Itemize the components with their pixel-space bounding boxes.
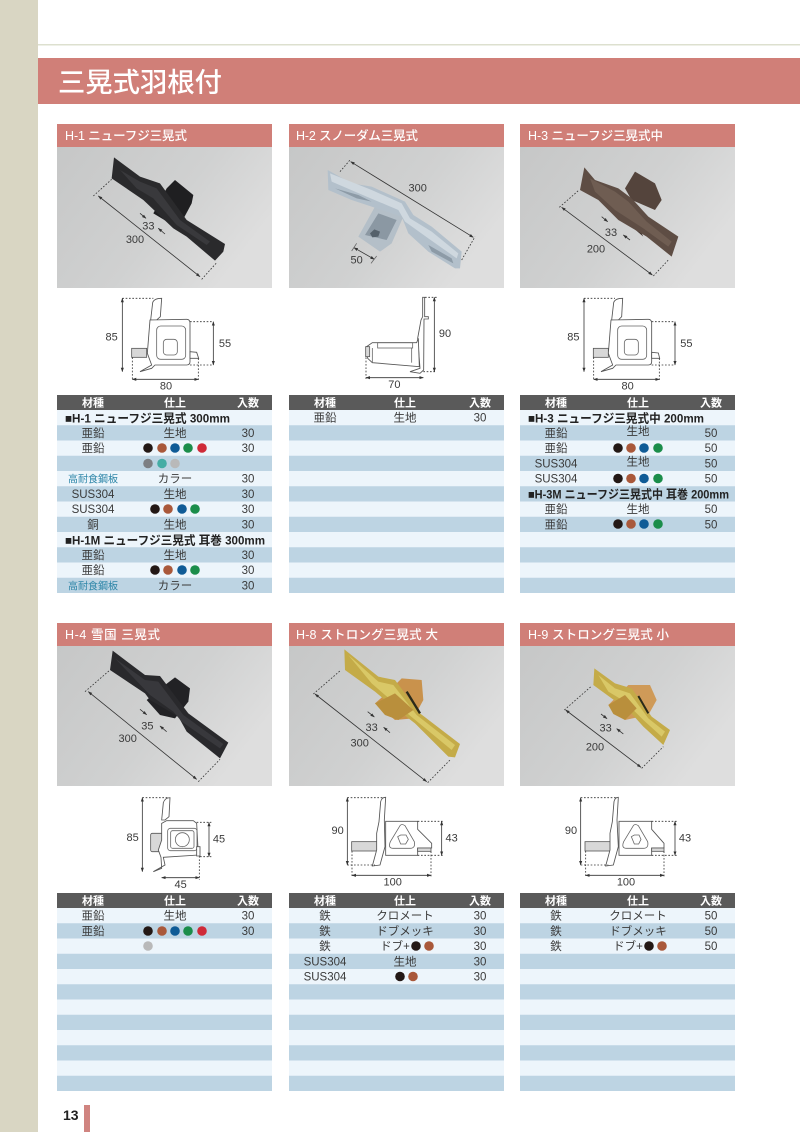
table: H-8: クロメート <box>376 910 434 923</box>
table: H-4: 30 <box>242 926 254 938</box>
table: H-9: 鉄 <box>550 939 562 953</box>
drawing: H-4 section: 45 <box>175 879 187 891</box>
photo: H-3: 200 <box>587 243 605 255</box>
table: H-8: SUS304 <box>304 972 347 984</box>
table: H-8: ドブ+ <box>380 939 410 953</box>
drawing: H-8 section: 43 <box>446 832 458 844</box>
heading: H-3 <box>520 124 735 147</box>
table: H-3: 50 <box>705 443 717 455</box>
drawing: H-8 section: 100 <box>384 876 402 888</box>
table: H-9: 50 <box>705 911 717 923</box>
table: H-3: ■H-3 ニューフジ三晃式中 200mm <box>528 410 704 426</box>
heading: H-1 <box>57 124 272 147</box>
photo: H-4: 300 <box>119 733 137 745</box>
photo: H-8: 33 <box>366 722 378 734</box>
drawing: H-2 section <box>366 297 451 391</box>
table: H-3: ■H-3M ニューフジ三晃式中 耳巻 200mm <box>528 486 729 502</box>
drawing: H-2 section: 90 <box>439 328 451 340</box>
drawing: H-4 section <box>127 798 225 891</box>
panel: H-2 <box>289 124 504 593</box>
table: H-4 <box>57 893 272 1091</box>
table: H-2: 30 <box>474 413 486 425</box>
table: H-9: 鉄 <box>550 909 562 923</box>
table: H-8 <box>289 893 504 1091</box>
table: H-1: 生地 <box>164 548 187 562</box>
table: H-1: 亜鉛 <box>82 427 105 440</box>
table: H-9: 入数 <box>700 894 722 908</box>
table: H-8: SUS304 <box>304 956 347 968</box>
table: H-3 <box>520 395 735 593</box>
table: H-1: ■H-1 ニューフジ三晃式 300mm <box>65 410 230 426</box>
drawing: H-1 section: 80 <box>160 381 172 393</box>
table: H-1: 30 <box>242 565 254 577</box>
heading: H-4 <box>57 623 272 646</box>
table: H-1: 30 <box>242 550 254 562</box>
table: H-1: 銅 <box>87 517 99 531</box>
photo: H-3: 33 <box>605 227 617 239</box>
table: H-2: 入数 <box>469 396 491 410</box>
table: H-3: 生地 <box>626 424 650 438</box>
drawing: H-8 section: 90 <box>332 825 344 837</box>
table: H-8: 材種 <box>314 894 336 908</box>
page number <box>63 1105 90 1132</box>
drawing: H-3 section: 80 <box>622 381 634 393</box>
table: H-8: 30 <box>474 926 486 938</box>
drawing: H-9 section: 43 <box>679 832 691 844</box>
table: H-1: SUS304 <box>72 489 115 501</box>
panel: H-8 <box>289 623 504 1091</box>
photo: H-1: 33 <box>142 221 154 233</box>
table: H-1: 30 <box>242 474 254 486</box>
panel: H-9 <box>520 623 735 1091</box>
photo: H-2: 300 <box>409 182 427 194</box>
photo: H-4: 35 <box>141 720 153 732</box>
photo: H-9 <box>520 646 735 786</box>
table: H-9: 50 <box>705 941 717 953</box>
heading: H-2: H-2 スノーダム三晃式 <box>296 128 418 143</box>
table: H-9: 材種 <box>545 894 567 908</box>
table: H-8: 鉄 <box>319 939 331 953</box>
photo: H-2: 50 <box>351 255 363 267</box>
photo: H-2 <box>289 147 504 288</box>
table: H-1: 生地 <box>164 517 187 531</box>
table: H-9: 鉄 <box>550 924 562 938</box>
table: H-1: 高耐食鋼板 <box>68 579 118 592</box>
table: H-1: 亜鉛 <box>82 442 105 455</box>
table: H-1: 30 <box>242 443 254 455</box>
table: H-2: 亜鉛 <box>314 412 337 425</box>
table: H-9: 仕上 <box>627 894 649 908</box>
table: H-1: カラー <box>158 579 192 592</box>
table: H-9: 50 <box>705 926 717 938</box>
table: H-4: 材種 <box>82 894 104 908</box>
sidebar strip <box>0 0 38 1132</box>
table: H-9: クロメート <box>609 910 667 923</box>
table: H-1: カラー <box>158 473 192 486</box>
drawing: H-3 section: 85 <box>567 331 579 343</box>
table: H-1: 30 <box>242 428 254 440</box>
table: H-8: 鉄 <box>319 924 331 938</box>
drawing: H-3 section <box>567 298 692 393</box>
table: H-3: SUS304 <box>535 474 578 486</box>
table: H-8: 鉄 <box>319 909 331 923</box>
table: H-4: 亜鉛 <box>82 925 105 938</box>
photo: H-1 <box>57 147 272 288</box>
table: H-8: 入数 <box>469 894 491 908</box>
photo: H-9: 33 <box>600 722 612 734</box>
table: H-1: 30 <box>242 489 254 501</box>
drawing: H-1 section <box>106 298 231 393</box>
table: H-1: 仕上 <box>164 396 186 410</box>
photo: H-8: 300 <box>351 737 369 749</box>
drawing: H-2 section: 70 <box>388 379 400 391</box>
drawing: H-9 section: 90 <box>565 825 577 837</box>
table: H-2: 仕上 <box>394 396 416 410</box>
table: H-1: 高耐食鋼板 <box>68 473 118 486</box>
heading: H-2 <box>289 124 504 147</box>
table: H-4: 亜鉛 <box>82 910 105 923</box>
table: H-3: 亜鉛 <box>544 442 568 455</box>
table: H-1: 亜鉛 <box>82 549 105 562</box>
table: H-3: 亜鉛 <box>544 503 568 516</box>
heading: H-3: H-3 ニューフジ三晃式中 <box>528 128 663 143</box>
heading: H-9 <box>520 623 735 646</box>
table: H-2 <box>289 395 504 593</box>
photo: H-3 <box>520 147 735 288</box>
table: H-3: 生地 <box>626 502 650 516</box>
panel: H-1 <box>57 124 272 593</box>
table: H-9: ドブメッキ <box>609 924 667 938</box>
table: H-3: 50 <box>705 504 717 516</box>
table: H-8: ドブメッキ <box>376 924 434 938</box>
table: H-1: 生地 <box>164 426 187 440</box>
panel: H-4 <box>57 623 272 1091</box>
title band <box>38 58 800 104</box>
heading: H-4: H-4 雪国 三晃式 <box>65 627 160 642</box>
table: H-4: 30 <box>242 911 254 923</box>
drawing: H-9 section: 100 <box>617 876 635 888</box>
table: H-3: 50 <box>705 519 717 531</box>
table: H-3: 亜鉛 <box>544 518 568 531</box>
photo: H-8 <box>289 646 504 786</box>
table: H-1 <box>57 395 272 593</box>
table: H-1: 入数 <box>237 396 259 410</box>
heading: H-9: H-9 ストロング三晃式 小 <box>528 627 669 642</box>
table: H-1: 材種 <box>82 396 104 410</box>
table: H-9: ドブ+ <box>613 939 643 953</box>
table: H-3: 亜鉛 <box>544 427 568 440</box>
heading: H-1: H-1 ニューフジ三晃式 <box>65 128 187 143</box>
heading: H-8 <box>289 623 504 646</box>
table: H-8: 30 <box>474 911 486 923</box>
table: H-8: 仕上 <box>394 894 416 908</box>
table: H-8: 30 <box>474 972 486 984</box>
table: H-4: 生地 <box>164 909 187 923</box>
panel: H-3 <box>520 124 735 593</box>
title band: 三晃式羽根付 <box>58 68 222 98</box>
drawing: H-9 section <box>565 797 691 888</box>
table: H-2: 材種 <box>314 396 336 410</box>
drawing: H-4 section: 85 <box>127 832 139 844</box>
table: H-3: SUS304 <box>535 458 578 470</box>
table: H-1: 生地 <box>164 487 187 501</box>
drawing: H-1 section: 85 <box>106 331 118 343</box>
table: H-8: 30 <box>474 941 486 953</box>
table: H-2: 生地 <box>394 411 417 425</box>
table: H-3: 50 <box>705 474 717 486</box>
photo: H-1: 300 <box>126 234 144 246</box>
drawing: H-1 section: 55 <box>219 338 231 350</box>
table: H-3: 仕上 <box>627 396 649 410</box>
drawing: H-4 section: 45 <box>213 834 225 846</box>
table: H-1: SUS304 <box>72 504 115 516</box>
photo: H-4 <box>57 646 272 786</box>
table: H-1: 亜鉛 <box>82 564 105 577</box>
table: H-3: 入数 <box>700 396 722 410</box>
table: H-3: 50 <box>705 458 717 470</box>
photo: H-9: 200 <box>586 741 604 753</box>
table: H-9 <box>520 893 735 1091</box>
table: H-1: ■H-1M ニューフジ三晃式 耳巻 300mm <box>65 532 265 548</box>
table: H-3: 材種 <box>545 396 567 410</box>
table: H-1: 30 <box>242 504 254 516</box>
page number: 13 <box>63 1107 79 1123</box>
table: H-1: 30 <box>242 580 254 592</box>
drawing: H-3 section: 55 <box>680 338 692 350</box>
table: H-8: 生地 <box>394 954 417 968</box>
drawing: H-8 section <box>332 797 458 888</box>
table: H-1: 30 <box>242 519 254 531</box>
table: H-4: 仕上 <box>164 894 186 908</box>
heading: H-8: H-8 ストロング三晃式 大 <box>296 627 438 642</box>
table: H-3: 生地 <box>626 454 650 468</box>
table: H-4: 入数 <box>237 894 259 908</box>
table: H-8: 30 <box>474 956 486 968</box>
table: H-3: 50 <box>705 428 717 440</box>
